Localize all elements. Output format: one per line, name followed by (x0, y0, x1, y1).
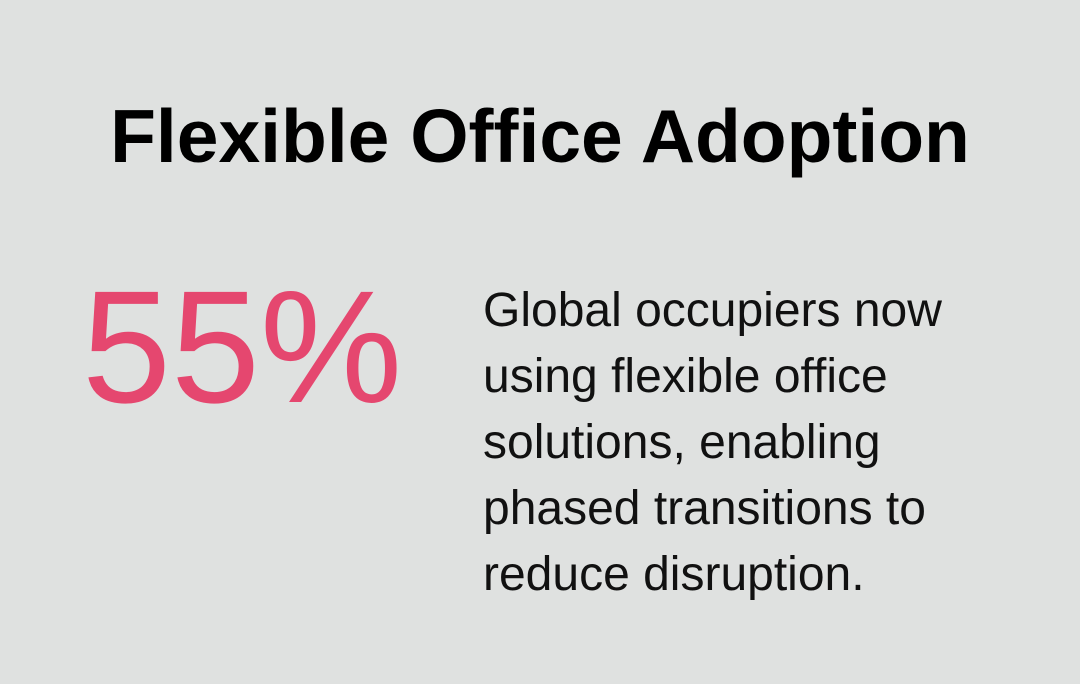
statistic: 55%: 55% (82, 257, 402, 436)
description text (483, 284, 942, 601)
description text: using flexible office (483, 350, 888, 403)
description text: solutions, enabling (483, 416, 881, 469)
description text: phased transitions to (483, 482, 926, 535)
description text: reduce disruption. (483, 548, 865, 601)
description text: Global occupiers now (483, 284, 942, 337)
title: Flexible Office Adoption (110, 94, 970, 178)
